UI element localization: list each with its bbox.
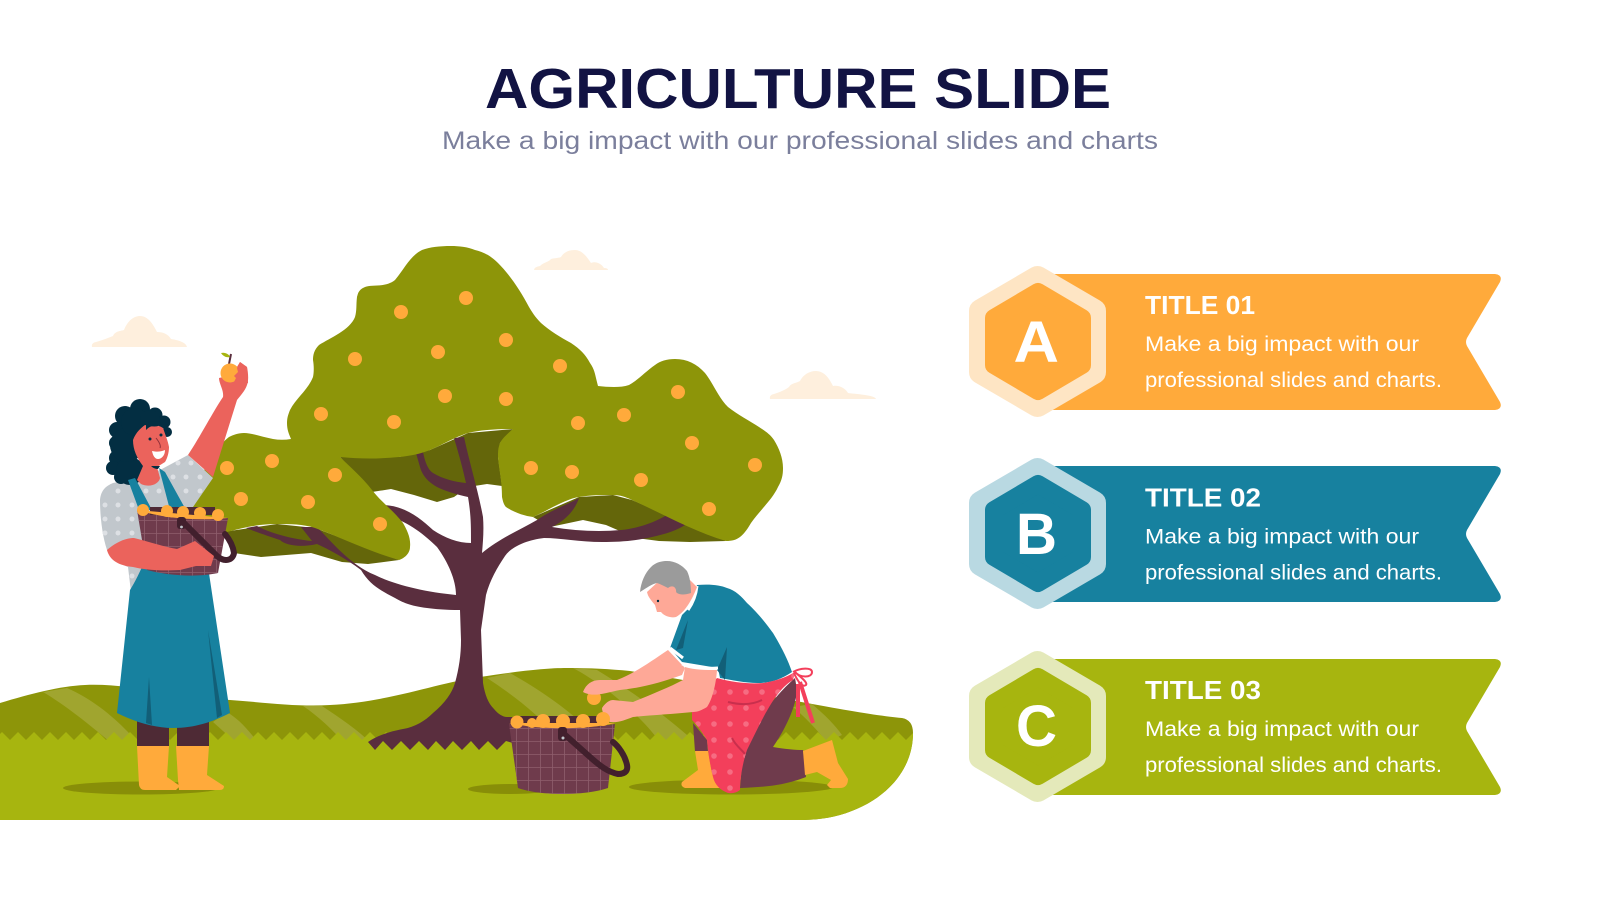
woman apron dress <box>117 468 230 728</box>
woman boots <box>137 746 224 790</box>
card C <box>981 659 1501 795</box>
woman shirt <box>100 455 213 592</box>
heading C: TITLE 03 <box>1145 675 1261 705</box>
woman legs <box>137 715 209 746</box>
hexagon badge B <box>981 470 1094 597</box>
man front arm <box>602 667 717 722</box>
banner A <box>1030 274 1501 410</box>
body text A <box>1145 333 1442 392</box>
woman arm holding basket <box>107 538 214 570</box>
body text C: professional slides and charts. <box>1145 754 1442 777</box>
body text B: professional slides and charts. <box>1145 562 1442 584</box>
ground basket <box>509 712 627 794</box>
basket handle <box>182 521 234 560</box>
man shirt <box>670 585 792 683</box>
apron tie <box>793 669 813 723</box>
cloud left <box>92 316 187 347</box>
ground basket handle <box>563 733 627 774</box>
hexagon badge B: B <box>1016 502 1057 567</box>
illustration: agriculture scene <box>0 246 920 825</box>
tree trunk and branches <box>246 437 688 750</box>
tree canopy <box>190 246 783 560</box>
hexagon badge A <box>981 278 1094 405</box>
heading A: TITLE 01 <box>1145 290 1255 320</box>
orange in man hand <box>587 691 601 705</box>
banner B <box>1030 466 1501 602</box>
tree <box>190 246 783 750</box>
hills <box>0 660 920 825</box>
man head <box>640 561 697 617</box>
woman figure <box>100 353 248 790</box>
banner C <box>1030 659 1501 795</box>
woman face <box>133 421 169 486</box>
cloud right <box>770 371 876 399</box>
card B <box>981 466 1501 602</box>
body text A: Make a big impact with our <box>1145 333 1419 356</box>
body text B: Make a big impact with our <box>1145 526 1419 548</box>
woman raised arm <box>188 362 248 477</box>
body text B <box>1145 526 1442 584</box>
body text C: Make a big impact with our <box>1145 718 1419 741</box>
card A <box>981 274 1501 410</box>
ground shadows <box>63 780 833 794</box>
hexagon badge A: A <box>1014 310 1059 375</box>
man figure <box>583 561 848 793</box>
orange in hand <box>220 353 248 386</box>
ground <box>0 740 920 825</box>
woman basket <box>137 504 234 576</box>
canopy underside <box>223 429 726 564</box>
oranges on tree <box>220 291 762 531</box>
subtitle: Make a big impact with our professional slides and charts <box>442 127 1158 155</box>
man back arm <box>583 650 685 695</box>
body text A: professional slides and charts. <box>1145 369 1442 392</box>
cloud top <box>534 250 608 270</box>
hexagon badge C: C <box>1016 694 1057 759</box>
man apron <box>692 672 795 793</box>
woman hair <box>106 399 172 485</box>
hexagon badge C <box>981 663 1094 790</box>
field stripes <box>43 668 842 744</box>
body text C <box>1145 718 1442 777</box>
title: AGRICULTURE SLIDE <box>485 57 1111 121</box>
heading B: TITLE 02 <box>1145 482 1261 512</box>
man pants <box>693 678 806 788</box>
man boots <box>681 740 848 788</box>
